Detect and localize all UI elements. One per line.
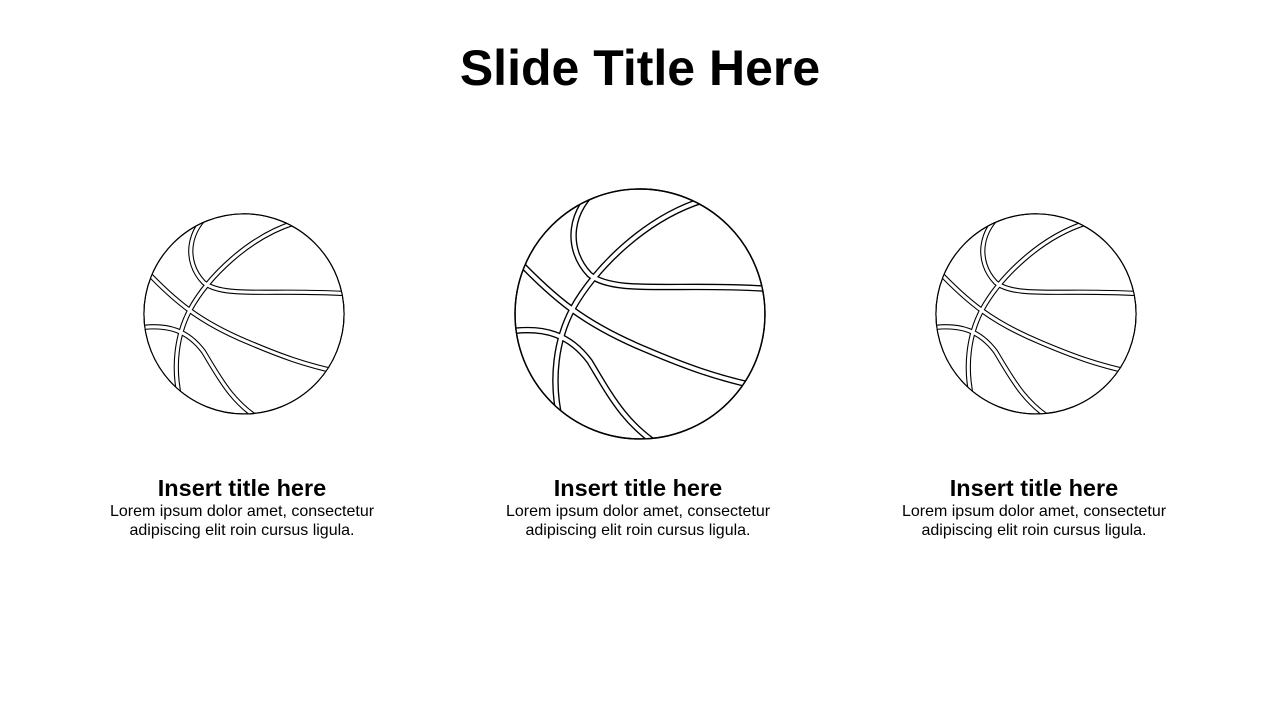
caption left: Insert title here: [158, 475, 326, 501]
caption center: Lorem ipsum dolor amet, consectetur: [506, 503, 770, 520]
caption center: adipiscing elit roin cursus ligula.: [526, 522, 750, 539]
caption center: Insert title here: [554, 475, 722, 501]
caption right: adipiscing elit roin cursus ligula.: [922, 522, 1146, 539]
caption right: [902, 475, 1166, 539]
caption right: Lorem ipsum dolor amet, consectetur: [902, 503, 1166, 520]
caption left: Lorem ipsum dolor amet, consectetur: [110, 503, 374, 520]
caption center: [506, 475, 770, 539]
caption left: adipiscing elit roin cursus ligula.: [130, 522, 354, 539]
icon: basketball right: [935, 213, 1137, 414]
title: Slide Title Here: [460, 40, 820, 96]
icon: basketball left: [143, 213, 345, 414]
caption right: Insert title here: [950, 475, 1118, 501]
icon: basketball center: [514, 188, 766, 440]
caption left: [110, 475, 374, 539]
